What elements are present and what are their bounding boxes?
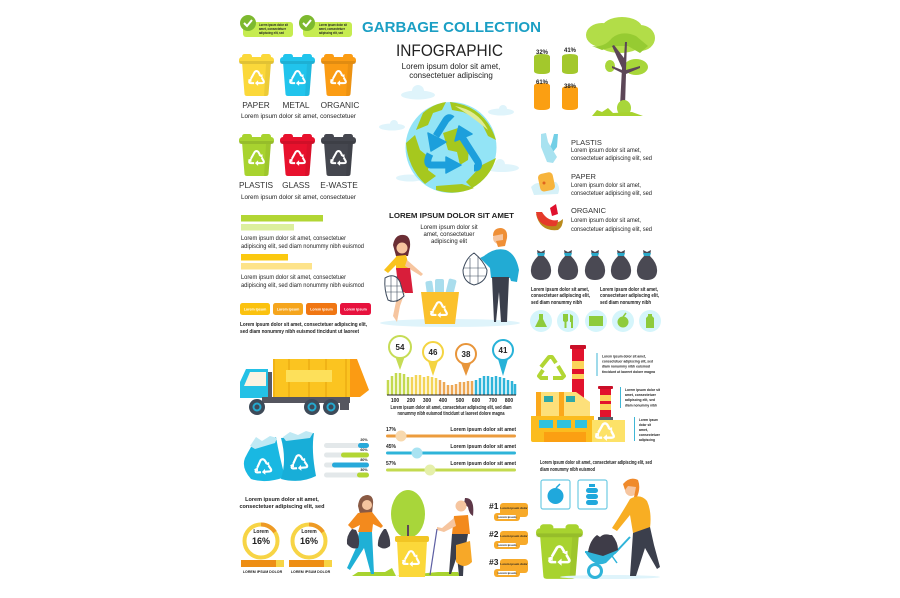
- man: [612, 479, 660, 576]
- section text: [420, 225, 478, 245]
- bag caption right: Lorem ipsum dolor sit amet,: [600, 287, 659, 293]
- axis labels: [391, 398, 513, 404]
- icon: orange organic bin: [321, 54, 356, 96]
- rank 3: Lorem ipsum: [498, 571, 517, 575]
- bold note: Lorem ipsum dolor sit amet, consectetuer adipiscing elit,: [240, 322, 368, 328]
- bag caption left: [531, 287, 591, 306]
- factory note 1: tincidunt ut laoreet dolore magna: [602, 370, 656, 374]
- bins row 2: [239, 134, 358, 201]
- title: GARBAGE COLLECTION: [362, 19, 541, 36]
- factory note 3: amet,: [639, 428, 648, 432]
- cylinders chart: 41%: [564, 48, 577, 54]
- factory caption: [540, 460, 652, 473]
- subtitle: INFOGRAPHIC: [396, 41, 503, 60]
- label: paper: PAPER: [242, 100, 270, 110]
- progress bar right: [289, 560, 332, 574]
- badge: second check note: adipiscing elit, sed: [319, 31, 343, 35]
- chart caption: Lorem ipsum dolor sit amet, consectetuer adipiscing elit, sed diam: [390, 405, 512, 411]
- recycle arrows: [428, 118, 478, 173]
- cylinders chart: 61%: [536, 80, 549, 86]
- tall chimney: [570, 345, 586, 398]
- cab: [240, 369, 268, 398]
- axis labels: 800: [505, 398, 513, 404]
- sack progress bars: 30%: [360, 468, 368, 472]
- label: organic: ORGANIC: [571, 206, 607, 215]
- slider green: 57%: [386, 461, 397, 467]
- icon: dark e-waste bin: [321, 134, 356, 176]
- factory note 3: dolor sit: [639, 423, 652, 427]
- waste type list: [531, 133, 652, 233]
- icon: apple tile: [541, 480, 570, 509]
- slider orange: [386, 427, 516, 442]
- factory note 1: Lorem ipsum dolor sit amet,: [602, 354, 646, 358]
- intro text: consectetuer adipiscing: [409, 71, 493, 80]
- sack progress bars: 80%: [360, 458, 368, 462]
- text: plastics: [571, 148, 652, 162]
- bold note: sed diam nonummy nibh euismod tincidunt ut laoreet: [240, 329, 359, 335]
- sack progress bars: [324, 438, 369, 478]
- icon: blue metal bin: [280, 54, 315, 96]
- cylinders chart: 38%: [564, 84, 577, 90]
- yellow recycling bucket with bottles: [421, 278, 459, 324]
- section heading: LOREM IPSUM DOLOR SIT AMET: [389, 211, 514, 220]
- bar block: adipiscing elit, sed diam nonummy nibh euismod: [241, 283, 364, 289]
- factory note 3: consectetuer: [639, 433, 661, 437]
- sack progress bars: 60%: [360, 448, 368, 452]
- icon: battery tile: [578, 480, 607, 509]
- label: e-waste: E-WASTE: [320, 180, 358, 190]
- rank 2: [489, 529, 528, 549]
- progress bar right: LOREM IPSUM DOLOR: [291, 570, 331, 574]
- slider blue: [386, 444, 516, 458]
- bar block: adipiscing elit, sed diam nonummy nibh euismod: [241, 244, 364, 250]
- label pills: Lorem ipsum: [310, 308, 333, 312]
- badge: first check note: adipiscing elit, sed: [259, 31, 284, 35]
- section text: Lorem ipsum dolor sit: [420, 225, 478, 231]
- chart caption: [390, 405, 512, 417]
- donut chart right: [292, 524, 326, 558]
- pin 38: 38: [462, 350, 471, 359]
- icon: large green bin: [536, 524, 583, 579]
- bag caption left: Lorem ipsum dolor sit amet,: [531, 287, 590, 293]
- label pills: Lorem ipsum: [277, 308, 299, 312]
- bins row 1: [239, 54, 359, 120]
- bag caption left: sed diam nonummy nibh: [531, 300, 582, 306]
- slider green: [386, 461, 516, 476]
- globe: [379, 85, 519, 193]
- label: metal: METAL: [282, 100, 310, 110]
- bold note: [240, 322, 368, 335]
- label: organic: ORGANIC: [321, 100, 359, 110]
- icon: apple: [618, 313, 628, 328]
- factory note 3: [634, 417, 661, 442]
- factory note 2: Lorem ipsum dolor sit: [625, 388, 661, 392]
- wheelbarrow: [585, 534, 630, 578]
- bag caption right: [600, 287, 660, 306]
- bar chart with pins: [387, 336, 516, 404]
- rank 2: #2: [489, 529, 499, 539]
- black garbage bags: [531, 250, 657, 280]
- cargo box: [273, 359, 350, 397]
- bag caption right: sed diam nonummy nibh: [600, 300, 651, 306]
- slider orange: Lorem ipsum dolor sit amet: [450, 427, 516, 433]
- label pills: Lorem ipsum: [344, 308, 367, 312]
- label: glass: GLASS: [282, 180, 310, 190]
- circle icons row: [530, 310, 661, 332]
- icon: cutlery: [563, 314, 573, 328]
- clouds: [379, 85, 519, 182]
- rank 1: Lorem ipsum dolor: [500, 506, 528, 510]
- tree illustration: [586, 17, 655, 116]
- cylinders chart: [534, 48, 578, 110]
- continents: [406, 102, 496, 193]
- rank 2: Lorem ipsum dolor: [500, 534, 528, 538]
- factory note 1: diam nonummy nibh euismod: [602, 364, 650, 368]
- label: paper: PAPER: [571, 172, 596, 181]
- factory note 2: adipiscing elit, sed: [625, 398, 655, 402]
- slider green: Lorem ipsum dolor sit amet: [450, 461, 516, 467]
- yellow bin with tree: [391, 490, 429, 577]
- text: paper: [571, 183, 652, 197]
- icon: organic waste: [536, 204, 563, 230]
- bar block: Lorem ipsum dolor sit amet, consectetuer: [241, 275, 346, 281]
- buildings: [536, 392, 590, 416]
- progress bar left: [241, 560, 284, 574]
- badge: second check note: [299, 15, 352, 37]
- rank 1: #1: [489, 501, 499, 511]
- axis labels: 200: [407, 398, 415, 404]
- factory note 2: [620, 387, 661, 408]
- woman with garbage bags: [347, 495, 390, 574]
- donut caption: [240, 497, 324, 510]
- text: organic: [571, 218, 652, 233]
- axis labels: 400: [439, 398, 447, 404]
- slider blue: 45%: [386, 444, 397, 450]
- man with net bag: [463, 228, 519, 322]
- icon: battery: [646, 314, 654, 328]
- slider blue: Lorem ipsum dolor sit amet: [450, 444, 516, 450]
- progress bar left: LOREM IPSUM DOLOR: [243, 570, 283, 574]
- rank 3: #3: [489, 557, 499, 567]
- donut chart right: Lorem: [301, 529, 317, 535]
- factory note 2: diam nonummy nibh: [625, 404, 657, 408]
- rank 3: [489, 557, 528, 577]
- rank 2: Lorem ipsum: [498, 543, 517, 547]
- bag caption left: consectetuer adipiscing elit,: [531, 293, 591, 299]
- ranked list: [489, 501, 528, 577]
- donut chart right: 16%: [300, 536, 318, 546]
- rank 1: [489, 501, 528, 521]
- label pills: Lorem ipsum: [244, 308, 266, 312]
- recycle symbol: [539, 357, 564, 378]
- woman with net bag: [384, 235, 423, 322]
- intro text: [402, 62, 500, 80]
- factory illustration: [531, 345, 625, 442]
- text: organic: Lorem ipsum dolor sit amet,: [571, 218, 641, 224]
- label pills: [240, 303, 371, 315]
- sack progress bars: 20%: [360, 438, 368, 442]
- factory note 1: [596, 353, 656, 376]
- badge: first check note: amet, consectetuer: [259, 27, 286, 31]
- axis labels: 100: [391, 398, 399, 404]
- axis labels: 700: [489, 398, 497, 404]
- pin 46: 46: [429, 348, 438, 357]
- icon: red glass bin: [280, 134, 315, 176]
- bar block: [241, 215, 364, 289]
- axis labels: 500: [456, 398, 464, 404]
- icon: plastic bottles: [541, 133, 558, 163]
- pin 54: 54: [396, 343, 405, 352]
- bag caption right: consectetuer adipiscing elit,: [600, 293, 660, 299]
- section text: amet, consectetuer: [423, 232, 475, 238]
- text: plastics: consectetuer adipiscing elit, sed: [571, 156, 652, 162]
- icon: yellow paper bin: [239, 54, 274, 96]
- axis labels: 600: [472, 398, 480, 404]
- factory note 3: Lorem ipsum: [639, 418, 658, 422]
- pin 41: 41: [499, 346, 508, 355]
- text: paper: Lorem ipsum dolor sit amet,: [571, 183, 641, 189]
- factory note 2: amet, consectetuer: [625, 393, 657, 397]
- recycling people scene: [380, 228, 520, 327]
- section text: adipiscing elit: [431, 239, 467, 245]
- text: plastics: Lorem ipsum dolor sit amet,: [571, 148, 641, 154]
- tree planting scene: [347, 490, 473, 577]
- icon: green plastics bin: [239, 134, 274, 176]
- icon: paper stack: [589, 316, 603, 326]
- text: paper: consectetuer adipiscing elit, sed: [571, 191, 652, 197]
- badge: second check note: amet, consectetuer: [319, 27, 345, 31]
- donut chart left: [244, 524, 278, 558]
- factory caption: Lorem ipsum dolor sit amet, consectetuer adipiscing elit, sed: [540, 460, 652, 466]
- badge: first check note: Lorem ipsum dolor sit: [259, 23, 289, 27]
- caption: Lorem ipsum dolor sit amet, consectetuer: [241, 195, 356, 201]
- intro text: Lorem ipsum dolor sit amet,: [402, 62, 500, 71]
- slider orange: 17%: [386, 427, 397, 433]
- man with wheelbarrow: [560, 479, 660, 579]
- caption: Lorem ipsum dolor sit amet, consectetuer: [241, 114, 356, 120]
- wheels: [249, 399, 339, 415]
- text: organic: consectetuer adipiscing elit, sed: [571, 227, 652, 233]
- factory note 3: adipiscing: [639, 438, 655, 442]
- rank 3: Lorem ipsum dolor: [500, 562, 528, 566]
- bar block: Lorem ipsum dolor sit amet, consectetuer: [241, 236, 346, 242]
- bars: [388, 373, 515, 395]
- axis labels: 300: [423, 398, 431, 404]
- woman with litter picker: [430, 498, 473, 576]
- blue recycling sacks: [244, 431, 316, 481]
- icon: flask: [535, 314, 547, 327]
- factory caption: diam nonummy nibh euismod: [540, 467, 595, 473]
- garbage truck: [240, 359, 369, 415]
- badge: first check note: [240, 15, 293, 37]
- donut chart left: 16%: [252, 536, 270, 546]
- badge: second check note: Lorem ipsum dolor sit: [319, 23, 348, 27]
- factory note 1: consectetuer adipiscing elit, sed: [602, 360, 653, 364]
- rank 1: Lorem ipsum: [498, 515, 517, 519]
- short chimney: [598, 386, 613, 420]
- donut caption: Lorem ipsum dolor sit amet,: [245, 497, 319, 503]
- donut caption: consectetuer adipiscing elit, sed: [240, 504, 324, 510]
- donut chart left: Lorem: [253, 529, 269, 535]
- label: plastics: PLASTIS: [571, 138, 602, 147]
- chart caption: nonummy nibh euismod tincidunt ut laoreet dolore magna: [398, 411, 505, 417]
- cylinders chart: 32%: [536, 50, 549, 56]
- label: plastics: PLASTIS: [239, 180, 274, 190]
- chassis: [262, 397, 350, 403]
- icon: paper roll: [531, 172, 559, 195]
